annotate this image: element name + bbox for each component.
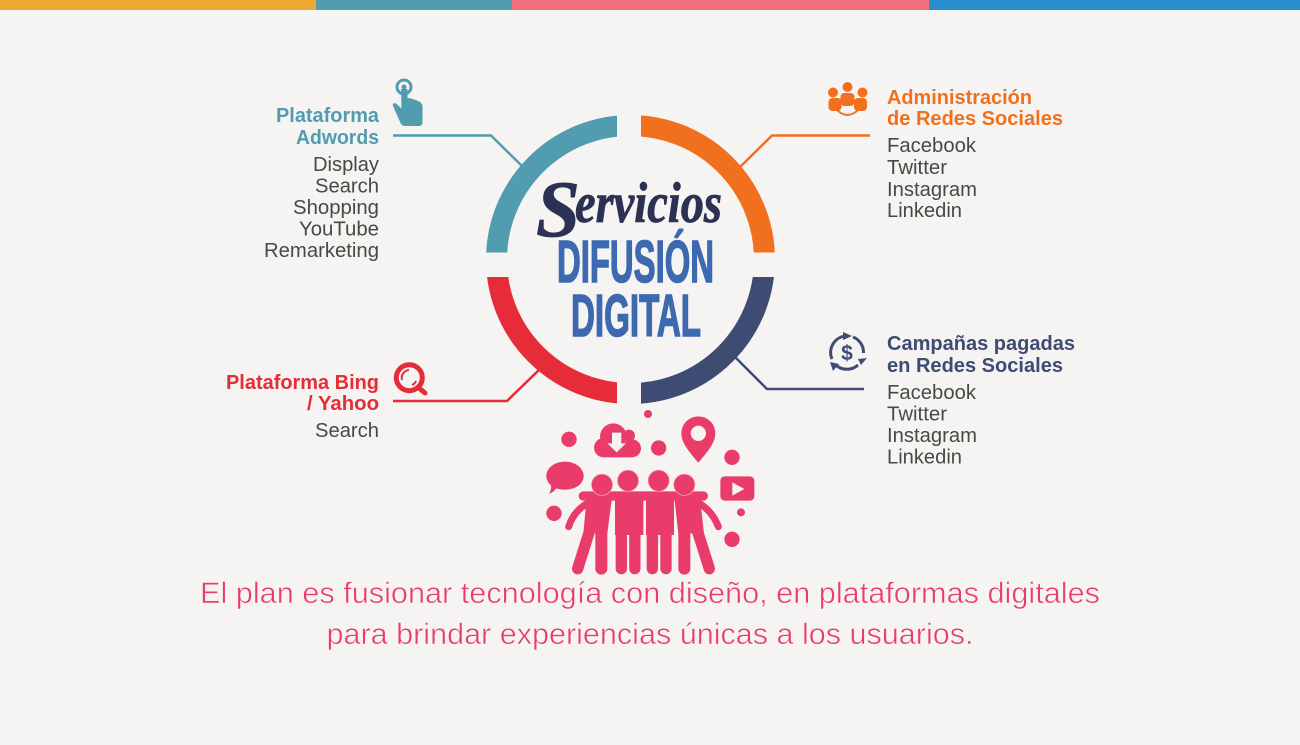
text: Plataforma Adwords: Plataforma (276, 105, 380, 127)
text: Administración de Redes Sociales: Administración (887, 87, 1032, 109)
central title: ervicios (575, 172, 722, 235)
icon: magnifying glass (396, 365, 425, 393)
text: Plataforma Bing Yahoo (226, 372, 379, 442)
icon: map pin (681, 416, 715, 463)
text: Plataforma Adwords: Display (313, 154, 379, 176)
connector line: Adwords (393, 136, 523, 167)
connector line: campañas pagadas (735, 357, 864, 389)
text: Plataforma Bing Yahoo: Plataforma Bing (226, 372, 379, 394)
icon: dollar cycle (830, 332, 867, 371)
tagline: El plan es fusionar tecnología con diseño, en plataformas digitales (200, 577, 1100, 610)
tagline (200, 577, 1100, 651)
icon: speech bubble (546, 462, 584, 494)
icon: cloud download (594, 423, 641, 457)
connector line: Bing Yahoo (393, 368, 541, 401)
icon: dollar cycle: $ (841, 342, 853, 365)
icon: pointing hand (393, 80, 422, 126)
people figures (569, 470, 718, 569)
ring chart (480, 108, 782, 412)
text: Campañas pagadas en Redes Sociales: Facebook (887, 382, 977, 404)
text: Administración de Redes Sociales: Facebook (887, 135, 977, 157)
text: Campañas pagadas en Redes Sociales: Campañas pagadas (887, 333, 1075, 355)
tagline: para brindar experiencias únicas a los usuarios. (326, 618, 973, 651)
text: Plataforma Adwords: Shopping (293, 197, 379, 219)
top colour bar (0, 0, 1300, 10)
central title: S (536, 166, 580, 254)
text: Campañas pagadas en Redes Sociales: Instagram (887, 425, 977, 447)
text: Administración de Redes Sociales (887, 87, 1063, 222)
icon: people group (828, 82, 868, 115)
text: Plataforma Bing Yahoo: Search (315, 420, 379, 442)
text: Campañas pagadas en Redes Sociales (887, 333, 1075, 468)
icon: floating dots (546, 410, 745, 547)
text: Plataforma Adwords: Search (315, 176, 379, 198)
illustration: group of people with digital icons (546, 410, 754, 569)
text: Campañas pagadas en Redes Sociales: Linkedin (887, 446, 962, 468)
text: Administración de Redes Sociales: de Redes Sociales (887, 108, 1063, 130)
text: Plataforma Adwords: Remarketing (264, 240, 379, 262)
text: Administración de Redes Sociales: Instagram (887, 179, 977, 201)
central title: DIGITAL (571, 283, 701, 349)
text: Campañas pagadas en Redes Sociales: en Redes Sociales (887, 355, 1063, 377)
text: Plataforma Adwords: Adwords (296, 127, 379, 149)
text: Plataforma Bing Yahoo: / Yahoo (307, 393, 379, 415)
text: Plataforma Adwords: YouTube (299, 218, 379, 240)
central title: DIFUSIÓN (557, 229, 714, 295)
connector line: redes sociales (739, 136, 870, 168)
text: Administración de Redes Sociales: Twitter (887, 157, 947, 179)
text: Plataforma Adwords (264, 105, 380, 262)
central title (536, 166, 722, 349)
icon: video play (720, 476, 754, 501)
text: Administración de Redes Sociales: Linkedin (887, 200, 962, 222)
text: Campañas pagadas en Redes Sociales: Twitter (887, 404, 947, 426)
